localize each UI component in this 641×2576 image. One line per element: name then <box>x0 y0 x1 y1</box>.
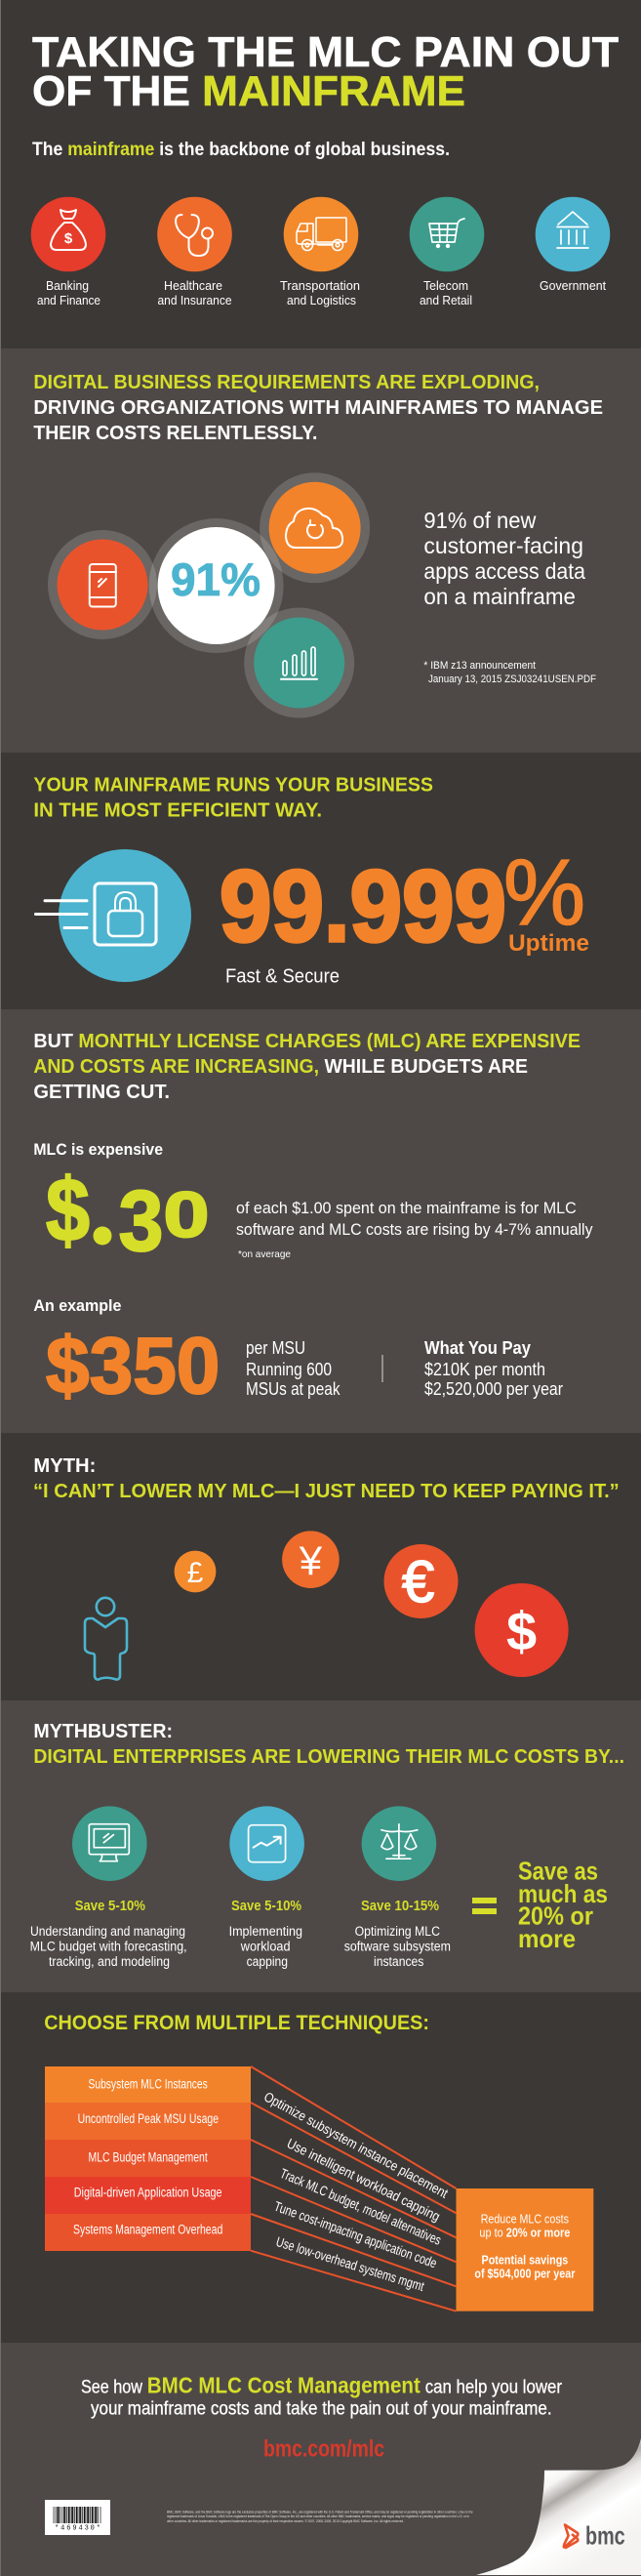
text: what you pay <box>424 1338 563 1399</box>
icon: dollar coin: $ <box>506 1601 537 1661</box>
item: budget management: tracking, and modeling <box>49 1954 170 1969</box>
heading <box>33 1031 581 1103</box>
panel: mythbuster <box>0 1700 641 1992</box>
text: per MSU <box>246 1338 341 1399</box>
item: budget management <box>30 1806 187 1969</box>
industry: healthcare and insurance <box>157 197 232 307</box>
callout: save as much as 20%: much as <box>518 1879 608 1908</box>
cost categories: Uncontrolled Peak MSU Usage <box>78 2111 219 2126</box>
icon: pound coin <box>175 1551 216 1592</box>
icon: cloud <box>286 509 342 548</box>
logo: bmc <box>564 2521 625 2551</box>
stat: $.30: 3 <box>119 1172 164 1269</box>
industry: banking and finance: and Finance <box>37 294 100 307</box>
icon: yen coin: ¥ <box>299 1537 323 1583</box>
stat: 99.999% uptime: 99.999 <box>220 850 506 963</box>
footnote: * IBM z13 announcement <box>423 660 536 672</box>
heading <box>33 775 433 822</box>
icon: bars <box>281 647 317 679</box>
text: per MSU: per MSU <box>246 1338 305 1358</box>
industry: banking and finance: Banking <box>46 279 89 293</box>
text: call to action: See how <box>81 2378 142 2398</box>
stat: 91%: 91% <box>171 553 260 605</box>
industry: government: Government <box>540 279 607 293</box>
text: per MSU: MSUs at peak <box>246 1379 341 1399</box>
footnote <box>423 660 596 685</box>
stat: $.30: $ <box>46 1161 90 1260</box>
title: OF THE MAINFRAME <box>32 67 465 115</box>
item: subsystem instances: software subsystem <box>344 1940 451 1954</box>
callout: save as much as 20%: more <box>518 1924 576 1953</box>
text: per MSU: Running 600 <box>246 1360 332 1379</box>
callout: reduce MLC costs: Reduce MLC costs <box>481 2212 569 2227</box>
legal text: BMC, BMC Software, and the BMC Software logo are the exclusive properties of BMC Software, Inc., are registered with the U.S. Patent and Trademark Office, and may be registered or pending registration in other countries. Linux is the <box>167 2510 473 2514</box>
text: call to action <box>81 2373 563 2419</box>
panel: techniques <box>0 1992 641 2343</box>
item: workload capping: workload <box>240 1940 291 1954</box>
icon: person <box>85 1598 127 1680</box>
heading <box>33 1455 620 1502</box>
connector bands <box>251 2066 457 2311</box>
text: call to action: can help you lower <box>425 2378 563 2398</box>
item: workload capping: Save 5-10% <box>231 1899 301 1914</box>
item: budget management: MLC budget with forecasting, <box>30 1940 187 1954</box>
panel: digital business requirements <box>0 348 641 753</box>
item: workload capping: capping <box>247 1954 288 1969</box>
heading: “I CAN’T LOWER MY MLC—I JUST NEED TO KEEP PAYING IT.” <box>33 1481 620 1502</box>
text: 91 percent description: customer-facing <box>423 533 583 558</box>
panel: MLC costs <box>0 1009 641 1433</box>
heading: DRIVING ORGANIZATIONS WITH MAINFRAMES TO MANAGE <box>33 397 603 419</box>
item: subsystem instances: Optimizing MLC <box>355 1924 440 1939</box>
icon: yen coin <box>282 1531 340 1588</box>
icon: phone <box>90 564 116 607</box>
connector bands: Tune cost-impacting application code <box>272 2198 439 2270</box>
text: what you pay: $2,520,000 per year <box>424 1379 563 1399</box>
callout: reduce MLC costs: Potential savings <box>482 2252 568 2267</box>
heading: MYTH: <box>33 1455 96 1477</box>
label: MLC is expensive: MLC is expensive <box>33 1140 163 1159</box>
text: MLC expense description: software and MLC costs are rising by 4-7% annually <box>236 1220 593 1239</box>
legal text: other countries. All other trademarks or registered trademarks are the property of their respective owners. © 2007, 2008, 2009, 2010 Copyright BMC Software, Inc. All rights reserved. <box>167 2519 404 2523</box>
panel: call to action <box>0 2343 641 2576</box>
industry: telecom and retail: Telecom <box>423 279 468 293</box>
text: MLC expense description: of each $1.00 spent on the mainframe is for MLC <box>236 1199 577 1217</box>
industry: banking and finance: $ <box>64 230 73 247</box>
panel: uptime <box>0 753 641 1009</box>
text: 91 percent description: on a mainframe <box>423 584 576 609</box>
barcode: *469430* <box>55 2524 100 2532</box>
page curl <box>476 2438 641 2575</box>
icon: equals sign <box>472 1898 497 1914</box>
footnote: January 13, 2015 ZSJ03241USEN.PDF <box>428 674 596 685</box>
text: MLC expense description: *on average <box>238 1248 291 1260</box>
item: budget management: Understanding and managing <box>30 1924 185 1939</box>
item: budget management: Save 5-10% <box>75 1899 145 1914</box>
item: subsystem instances <box>344 1806 451 1969</box>
callout: save as much as 20%: 20% or <box>518 1901 593 1931</box>
industry: transportation and logistics <box>280 197 360 307</box>
industry: telecom and retail <box>410 197 484 307</box>
title <box>32 28 619 115</box>
item: workload capping: Implementing <box>229 1924 302 1939</box>
text: call to action: your mainframe costs and take the pain out of your mainframe. <box>91 2398 552 2419</box>
heading: IN THE MOST EFFICIENT WAY. <box>33 800 322 822</box>
cost categories <box>45 2066 251 2251</box>
heading: CHOOSE FROM MULTIPLE TECHNIQUES: <box>44 2012 429 2034</box>
connector bands: Use low-overhead systems mgmt <box>274 2233 426 2294</box>
stat: 99.999% uptime: % <box>503 840 585 945</box>
stat: $.30: 0 <box>164 1178 209 1250</box>
cost categories: Systems Management Overhead <box>73 2223 222 2237</box>
legal text: registered trademark of Linus Torvalds. UNIX is the registered trademark of The Open Group in the US and other countries. All other BMC trademarks, service marks, and logos may be registered or pending registration in the U.S. or in <box>167 2515 469 2518</box>
callout: save as much as 20%: Save as <box>518 1857 598 1886</box>
stat: $.30 <box>46 1161 209 1269</box>
icon: secure lock <box>35 849 191 982</box>
industry: government <box>536 197 610 293</box>
callout: reduce MLC costs <box>457 2188 593 2311</box>
stat: 99.999% uptime: Uptime <box>508 930 589 957</box>
icon: pound coin: £ <box>187 1557 204 1589</box>
text: 91 percent description <box>423 508 585 609</box>
title: TAKING THE MLC PAIN OUT <box>32 28 619 76</box>
text: what you pay: $210K per month <box>424 1360 545 1379</box>
cost categories: Digital-driven Application Usage <box>74 2186 222 2200</box>
text: call to action: BMC MLC Cost Management <box>147 2373 421 2398</box>
heading: BUT MONTHLY LICENSE CHARGES (MLC) ARE EXPENSIVE <box>33 1031 581 1052</box>
subtitle: The mainframe is the backbone of global business. <box>32 140 450 160</box>
industry: banking and finance <box>31 197 105 307</box>
chart: 91 percent bubbles <box>48 472 370 718</box>
industry: transportation and logistics: Transportation <box>280 279 360 293</box>
industry: telecom and retail: and Retail <box>420 294 472 307</box>
label: an example: An example <box>33 1296 121 1315</box>
item: workload capping <box>229 1806 304 1969</box>
callout: save as much as 20% <box>518 1857 608 1953</box>
text: fast and secure: Fast & Secure <box>225 966 340 988</box>
text: 91 percent description: 91% of new <box>423 508 537 533</box>
industry: healthcare and insurance: Healthcare <box>164 279 222 293</box>
callout: reduce MLC costs: up to 20% or more <box>479 2226 570 2240</box>
heading: DIGITAL BUSINESS REQUIREMENTS ARE EXPLODING, <box>33 372 540 393</box>
heading <box>33 1721 624 1768</box>
heading <box>33 372 603 444</box>
panel: header <box>0 0 641 348</box>
callout: reduce MLC costs: of $504,000 per year <box>474 2267 575 2281</box>
industry: healthcare and insurance: and Insurance <box>158 294 232 307</box>
connector bands: Track MLC budget, model alternatives <box>278 2165 444 2248</box>
industry: transportation and logistics: and Logistics <box>287 294 356 307</box>
stat: $350: $350 <box>46 1322 220 1411</box>
heading: GETTING CUT. <box>33 1082 170 1103</box>
connector bands: Use intelligent workload capping <box>285 2135 443 2225</box>
heading: DIGITAL ENTERPRISES ARE LOWERING THEIR MLC COSTS BY... <box>33 1746 624 1768</box>
item: subsystem instances: instances <box>374 1954 424 1969</box>
icon: dollar coin <box>475 1583 569 1677</box>
heading: MYTHBUSTER: <box>33 1721 173 1742</box>
link: bmc.com/mlc: bmc.com/mlc <box>263 2436 384 2463</box>
cost categories: Subsystem MLC Instances <box>88 2076 208 2091</box>
logo: bmc: bmc <box>585 2521 625 2551</box>
heading: THEIR COSTS RELENTLESSLY. <box>33 423 317 444</box>
text: 91 percent description: apps access data <box>423 558 585 584</box>
cost categories: MLC Budget Management <box>88 2150 208 2165</box>
connector bands: Optimize subsystem instance placement <box>261 2089 451 2201</box>
item: subsystem instances: Save 10-15% <box>361 1899 439 1914</box>
icon: euro coin <box>384 1544 459 1618</box>
legal text <box>167 2510 473 2523</box>
panel: myth <box>0 1433 641 1700</box>
icon: euro coin: € <box>402 1549 434 1615</box>
heading: AND COSTS ARE INCREASING, WHILE BUDGETS ARE <box>33 1056 528 1078</box>
heading: YOUR MAINFRAME RUNS YOUR BUSINESS <box>33 775 433 797</box>
text: what you pay: What You Pay <box>424 1338 531 1358</box>
barcode <box>45 2500 110 2535</box>
text: MLC expense description <box>236 1199 593 1260</box>
